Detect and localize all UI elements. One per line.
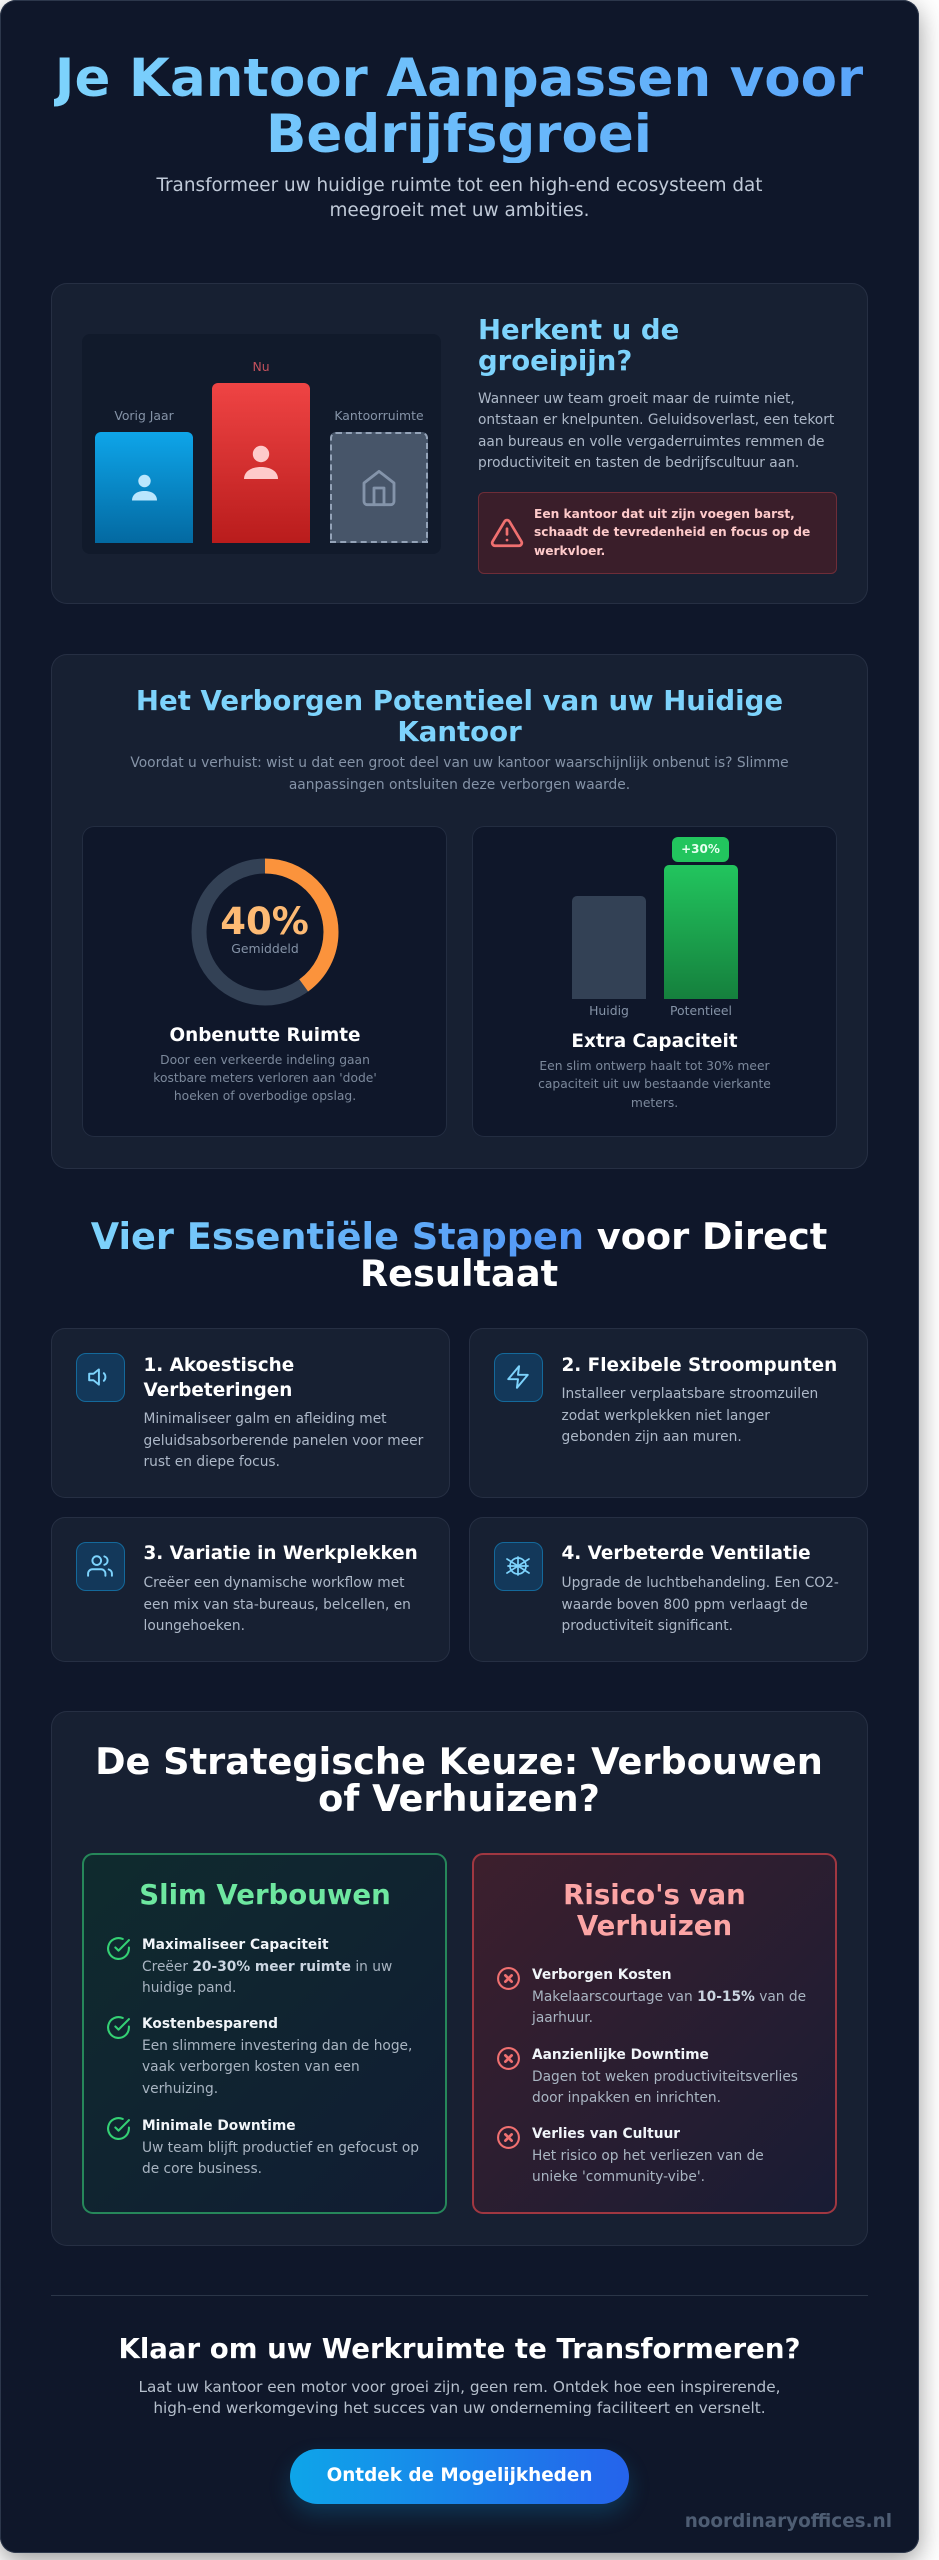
step text [562, 1386, 818, 1445]
step text: Upgrade de luchtbehandeling. Een CO2- [562, 1575, 839, 1591]
item: significant downtime: Aanzienlijke Downtime [532, 2047, 709, 2063]
title [54, 50, 864, 162]
item: significant downtime [532, 2047, 798, 2106]
label: last year: Vorig Jaar [114, 408, 174, 423]
call to action heading: Klaar om uw Werkruimte te Transformeren? [118, 2332, 801, 2364]
step 3 [51, 1517, 450, 1662]
item: hidden costs [532, 1967, 806, 2026]
intro text: aanpassingen ontsluiten deze verborgen waarde. [289, 777, 630, 793]
step text: Minimaliseer galm en afleiding met [144, 1411, 387, 1427]
step text: loungehoeken. [144, 1618, 245, 1634]
source watermark: noordinaryoffices.nl [685, 2511, 892, 2532]
icon: check [107, 2016, 130, 2039]
item: loss of culture: unieke 'community-vibe'. [532, 2169, 705, 2185]
step title [144, 1355, 294, 1400]
card text: Een slim ontwerp haalt tot 30% meer [539, 1059, 770, 1073]
heading [136, 684, 783, 748]
step 1 [51, 1328, 450, 1498]
step text: Creëer een dynamische workflow met [144, 1575, 405, 1591]
card title: Onbenutte Ruimte [170, 1025, 360, 1046]
icon: warning triangle [490, 518, 524, 548]
item: loss of culture: Het risico op het verliezen van de [532, 2148, 764, 2164]
heading: four steps [91, 1215, 827, 1294]
button [290, 2449, 629, 2504]
label: office space: Kantoorruimte [334, 408, 424, 423]
card title: Slim Verbouwen [139, 1878, 391, 1911]
card title [563, 1878, 746, 1942]
card text: capaciteit uit uw bestaande vierkante [538, 1077, 771, 1091]
panel: growing pains [51, 283, 868, 604]
card text: Door een verkeerde indeling gaan [160, 1052, 370, 1066]
step text: geluidsabsorberende panelen voor meer [144, 1432, 423, 1448]
heading: Het Verborgen Potentieel van uw Huidige [136, 684, 783, 716]
item: loss of culture [532, 2126, 764, 2185]
call to action text [139, 2378, 780, 2416]
item: minimal downtime: de core business. [142, 2161, 262, 2177]
donut chart: 40 percent [192, 858, 338, 1006]
body text [478, 390, 834, 471]
step text: Installeer verplaatsbare stroomzuilen [562, 1386, 818, 1402]
bar: potential [664, 864, 738, 998]
icon: people [76, 1542, 125, 1591]
stat label: Gemiddeld [231, 941, 299, 956]
heading: De Strategische Keuze: Verbouwen [95, 1740, 823, 1783]
item: maximise capacity: Creëer 20-30% meer ruimte in uw [142, 1958, 392, 1974]
item: maximise capacity [142, 1937, 392, 1996]
heading: Herkent u de [478, 314, 679, 346]
bar: last year [95, 432, 193, 543]
step title: 4. Verbeterde Ventilatie [562, 1543, 811, 1564]
bar: now [212, 383, 310, 543]
icon: house [362, 470, 396, 506]
step text: een mix van sta-bureaus, belcellen, en [144, 1596, 411, 1612]
title: Je Kantoor Aanpassen voor [55, 48, 863, 108]
label: now: Nu [252, 359, 270, 374]
item: minimal downtime: Minimale Downtime [142, 2118, 296, 2134]
item: cost saving: Kostenbesparend [142, 2016, 278, 2032]
item: significant downtime: Dagen tot weken productiviteitsverlies [532, 2068, 798, 2084]
subtitle: meegroeit met uw ambities. [330, 200, 589, 220]
step title: 3. Variatie in Werkplekken [144, 1543, 418, 1564]
card text [538, 1059, 771, 1110]
item: cost saving: Een slimmere investering dan de hoge, [142, 2038, 412, 2054]
icon: cross [497, 2126, 520, 2149]
call to action text: Laat uw kantoor een motor voor groei zijn, geen rem. Ontdek hoe een inspirerende, [139, 2378, 780, 2396]
callout text: schaadt de tevredenheid en focus op de [534, 525, 810, 539]
callout text: Een kantoor dat uit zijn voegen barst, [534, 507, 795, 521]
icon: speaker [76, 1353, 125, 1402]
icon: lightning bolt [494, 1353, 543, 1402]
item: cost saving: verhuizing. [142, 2080, 218, 2096]
icon: check [107, 2117, 130, 2140]
icon: cross [497, 1967, 520, 1990]
bar: office space [330, 432, 428, 543]
step text [562, 1575, 839, 1634]
title: Bedrijfsgroei [266, 104, 652, 164]
card: moving risks [472, 1853, 837, 2214]
subtitle: Transformeer uw huidige ruimte tot een high-end ecosysteem dat [156, 174, 763, 196]
item: minimal downtime [142, 2118, 419, 2177]
label: potential: Potentieel [670, 1002, 732, 1018]
item: minimal downtime: Uw team blijft productief en gefocust op [142, 2140, 419, 2156]
chart: team versus office space [82, 334, 441, 554]
card text [153, 1052, 377, 1103]
subtitle [156, 174, 763, 220]
label: current: Huidig [589, 1002, 629, 1018]
heading [478, 314, 679, 376]
card title: Extra Capaciteit [571, 1030, 738, 1052]
step 2 [469, 1328, 868, 1498]
call to action text: high-end werkomgeving het succes van uw onderneming faciliteert en versnelt. [153, 2398, 766, 2416]
body text: aan bureaus en volle vergaderruimtes remmen de [478, 434, 824, 450]
step text: gebonden zijn aan muren. [562, 1429, 742, 1445]
step text: rust en diepe focus. [144, 1454, 280, 1470]
item: cost saving [142, 2016, 412, 2096]
callout: warning [478, 492, 837, 574]
card text: kostbare meters verloren aan 'dode' [153, 1071, 377, 1085]
body text: ontstaan er knelpunten. Geluidsoverlast, een tekort [478, 412, 834, 428]
item: maximise capacity: huidige pand. [142, 1980, 236, 1996]
body text: productiviteit en tasten de bedrijfscultuur aan. [478, 455, 799, 471]
step 4 [469, 1517, 868, 1662]
item: significant downtime: door inpakken en inrichten. [532, 2090, 721, 2106]
item: hidden costs: jaarhuur. [532, 2010, 593, 2026]
stat value: 40% [220, 900, 309, 943]
step title: 2. Flexibele Stroompunten [562, 1355, 837, 1376]
body text: Wanneer uw team groeit maar de ruimte niet, [478, 390, 795, 406]
card: extra capacity [472, 826, 837, 1137]
item: cost saving: vaak verborgen kosten van een [142, 2059, 360, 2075]
icon: check [107, 1937, 130, 1960]
step title: 1. Akoestische [144, 1355, 294, 1376]
icon: cross [497, 2047, 520, 2070]
card text: meters. [631, 1096, 678, 1110]
callout text [534, 507, 810, 558]
panel: strategic choice [51, 1711, 868, 2246]
step text [144, 1411, 424, 1470]
step text: productiviteit significant. [562, 1618, 733, 1634]
icon: ventilation [494, 1542, 543, 1591]
step text: waarde boven 800 ppm verlaagt de [562, 1596, 808, 1612]
heading: four steps: Vier Essentiële Stappen voor Direct [91, 1215, 827, 1258]
heading: Kantoor [397, 714, 522, 748]
heading: four steps: Resultaat [360, 1252, 558, 1294]
card text: hoeken of overbodige opslag. [174, 1089, 356, 1103]
heading: of Verhuizen? [318, 1776, 600, 1820]
card: smart renovation [82, 1853, 447, 2214]
heading [95, 1740, 823, 1820]
badge: plus 30 percent: +30% [681, 842, 720, 856]
card: unused space [82, 826, 447, 1137]
item: loss of culture: Verlies van Cultuur [532, 2126, 680, 2142]
panel: hidden potential [51, 654, 868, 1169]
badge: plus 30 percent [672, 837, 729, 862]
step text [144, 1575, 411, 1634]
intro text [130, 755, 789, 793]
callout text: werkvloer. [534, 544, 605, 558]
item: hidden costs: Verborgen Kosten [532, 1967, 672, 1983]
card title: Risico's van [563, 1878, 746, 1911]
step title: Verbeteringen [144, 1380, 292, 1400]
intro text: Voordat u verhuist: wist u dat een groot deel van uw kantoor waarschijnlijk onbenut is? Slimme [130, 755, 789, 771]
card title: Verhuizen [577, 1908, 732, 1942]
heading: groeipijn? [478, 344, 632, 376]
step text: zodat werkplekken niet langer [562, 1408, 770, 1424]
bar: current [572, 896, 646, 998]
item: hidden costs: Makelaarscourtage van 10-15% van de [532, 1988, 806, 2004]
button: Ontdek de Mogelijkheden [327, 2465, 592, 2486]
item: maximise capacity: Maximaliseer Capaciteit [142, 1937, 329, 1953]
